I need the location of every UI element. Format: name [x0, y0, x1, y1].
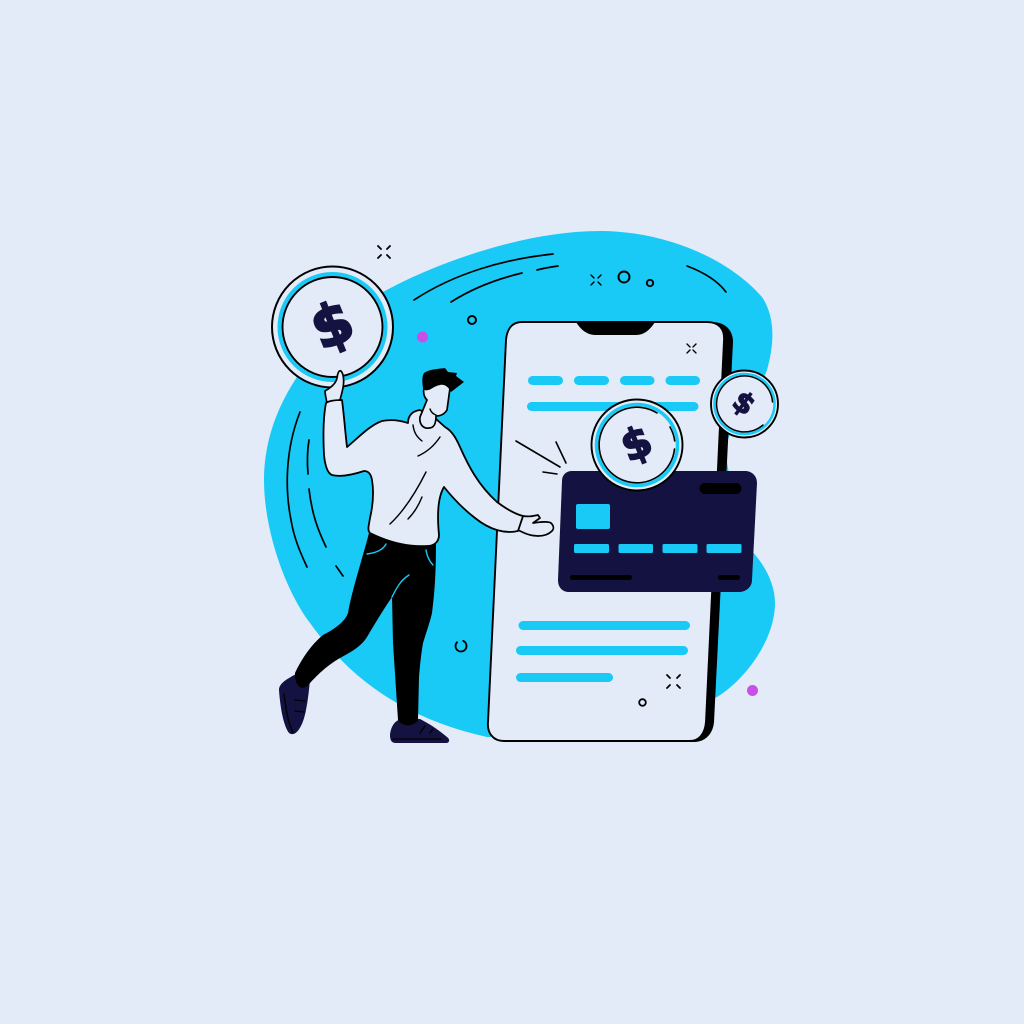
- burst lines: [516, 441, 566, 474]
- card magnetic pill: [700, 483, 742, 494]
- sweater folds: [390, 425, 440, 524]
- phone screen: [488, 322, 724, 741]
- coin large: [272, 266, 393, 388]
- card body: [558, 471, 757, 592]
- hair: [422, 368, 464, 392]
- trousers: [295, 533, 436, 725]
- decorative motion lines top: [414, 254, 726, 302]
- trouser highlights: [367, 544, 433, 597]
- back shoe: [279, 674, 310, 734]
- phone small circle: [639, 699, 646, 706]
- sparkle top left: [378, 246, 390, 258]
- hand right: [518, 515, 553, 536]
- bottom bars: [516, 621, 690, 682]
- phone: [488, 322, 733, 742]
- sparkle phone bottom: [667, 675, 680, 688]
- sweater: [323, 400, 523, 546]
- blue blob: [264, 231, 775, 737]
- credit card: [558, 471, 757, 592]
- motion lines left: [287, 412, 343, 576]
- phone back: [530, 322, 733, 742]
- sparkle phone top: [687, 344, 696, 353]
- coin centre: $: [614, 415, 659, 472]
- sparkle top centre: [591, 275, 601, 285]
- shoe laces: [284, 694, 441, 739]
- coin right: $: [726, 384, 762, 422]
- card chip: [576, 504, 610, 529]
- phone notch: [576, 322, 655, 335]
- coin centre: [592, 400, 682, 490]
- small circles and dots: [417, 272, 758, 696]
- neck and face: [420, 378, 450, 428]
- top bars: [527, 376, 700, 411]
- hand up: [325, 371, 344, 403]
- coin right: [711, 370, 778, 438]
- card number blocks: [574, 544, 742, 553]
- coin large: $: [302, 288, 363, 364]
- jaw crease: [430, 409, 436, 415]
- front shoe: [390, 719, 449, 743]
- card footer lines: [570, 575, 740, 580]
- person: [279, 368, 553, 743]
